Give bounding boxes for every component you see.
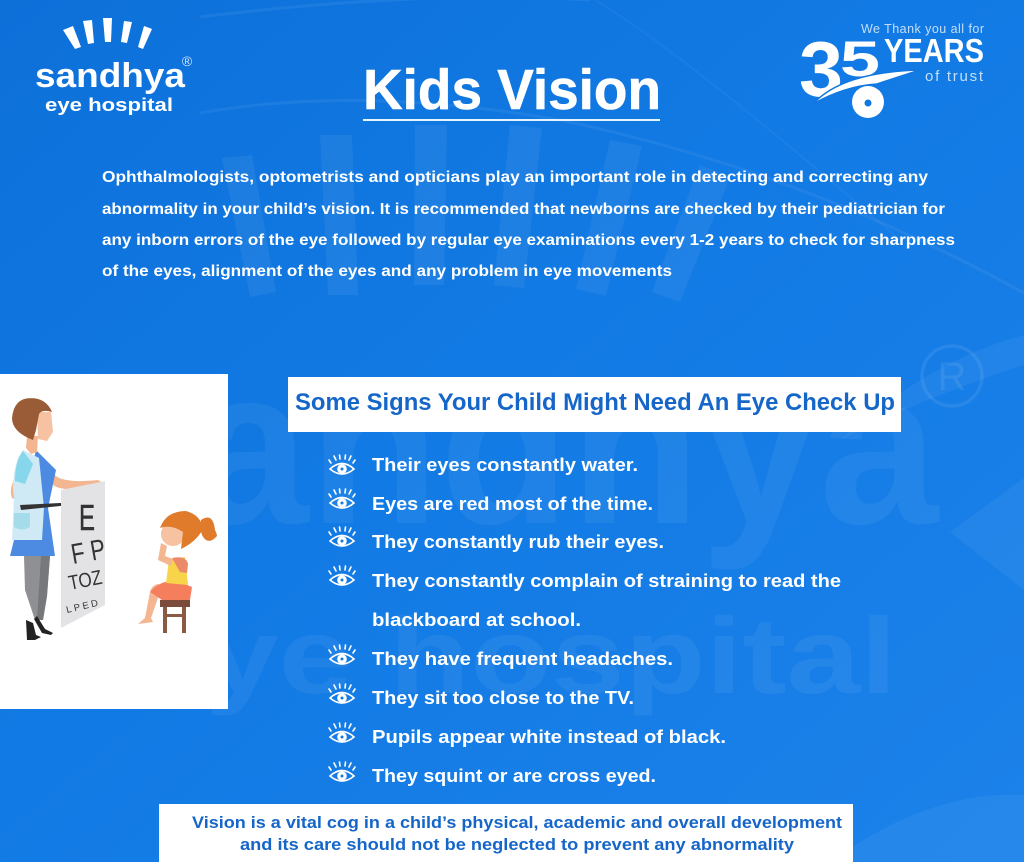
icon: eye bullet (329, 566, 355, 585)
icon: eye bullet (329, 527, 355, 546)
callout: Vision is a vital cog in a child’s physical, academic and overall development (192, 813, 842, 832)
logo subtitle: eye hospital (45, 95, 173, 115)
logo wordmark: sandhya (35, 57, 186, 95)
sign 8: They squint or are cross eyed. (372, 766, 656, 786)
illustration: child on stool (138, 511, 217, 633)
intro paragraph: of the eyes, alignment of the eyes and any problem in eye movements (102, 263, 672, 280)
sign 7: Pupils appear white instead of black. (372, 727, 726, 747)
sign 4 (372, 571, 841, 630)
intro paragraph: Ophthalmologists, optometrists and opticians play an important role in detecting and correcting any (102, 169, 928, 186)
heading panel: signs (288, 377, 901, 432)
callout (159, 804, 853, 862)
sign 4: They constantly complain of straining to read the (372, 571, 841, 591)
sign 5: They have frequent headaches. (372, 649, 673, 669)
icon: eye bullet (329, 762, 355, 781)
sign 1: Their eyes constantly water. (372, 455, 638, 475)
badge top line: We Thank you all for (861, 22, 984, 36)
panel: illustration (0, 374, 228, 709)
title: Kids Vision (363, 58, 661, 122)
sign 3: They constantly rub their eyes. (372, 532, 664, 552)
icon: eye bullet (329, 645, 355, 664)
watermark: andhya (190, 322, 940, 571)
heading panel: signs: Some Signs Your Child Might Need An Eye Check Up (295, 389, 895, 416)
illustration: eye chart: LPED (65, 597, 102, 616)
intro paragraph (102, 169, 955, 280)
list of signs (329, 455, 841, 786)
sign 2: Eyes are red most of the time. (372, 494, 653, 514)
watermark: R (938, 355, 966, 399)
badge numeral 5: 5 (840, 31, 880, 87)
logo: sandhya eye hospital (35, 18, 193, 115)
callout: and its care should not be neglected to prevent any abnormality (240, 835, 795, 854)
icon: logo rays (63, 18, 152, 49)
sign 4: blackboard at school. (372, 610, 581, 630)
icon: eye bullet (329, 455, 355, 474)
badge swoosh (813, 70, 920, 104)
illustration: eye chart: F P (69, 534, 108, 571)
sign 6: They sit too close to the TV. (372, 688, 634, 708)
illustration: eye chart: E (79, 498, 95, 538)
badge numeral 3: 3 (799, 25, 843, 113)
watermark: ye hospital (205, 595, 897, 716)
icon: eye bullet (329, 684, 355, 703)
badge: 35 years of trust (799, 22, 984, 118)
illustration: eye chart (61, 481, 108, 628)
intro paragraph: abnormality in your child’s vision. It is recommended that newborns are checked by their pediatrician for (102, 201, 945, 218)
badge eye (852, 86, 884, 118)
illustration: doctor (10, 398, 104, 640)
icon: eye bullet (329, 723, 355, 742)
badge of trust: of trust (925, 68, 984, 85)
illustration: eye chart: TOZ (66, 565, 104, 594)
registered mark: ® (182, 53, 193, 69)
badge years: YEARS (884, 32, 984, 69)
icon: eye bullet (329, 489, 355, 508)
intro paragraph: any inborn errors of the eye followed by regular eye examinations every 1-2 years to check for sharpness (102, 232, 955, 249)
